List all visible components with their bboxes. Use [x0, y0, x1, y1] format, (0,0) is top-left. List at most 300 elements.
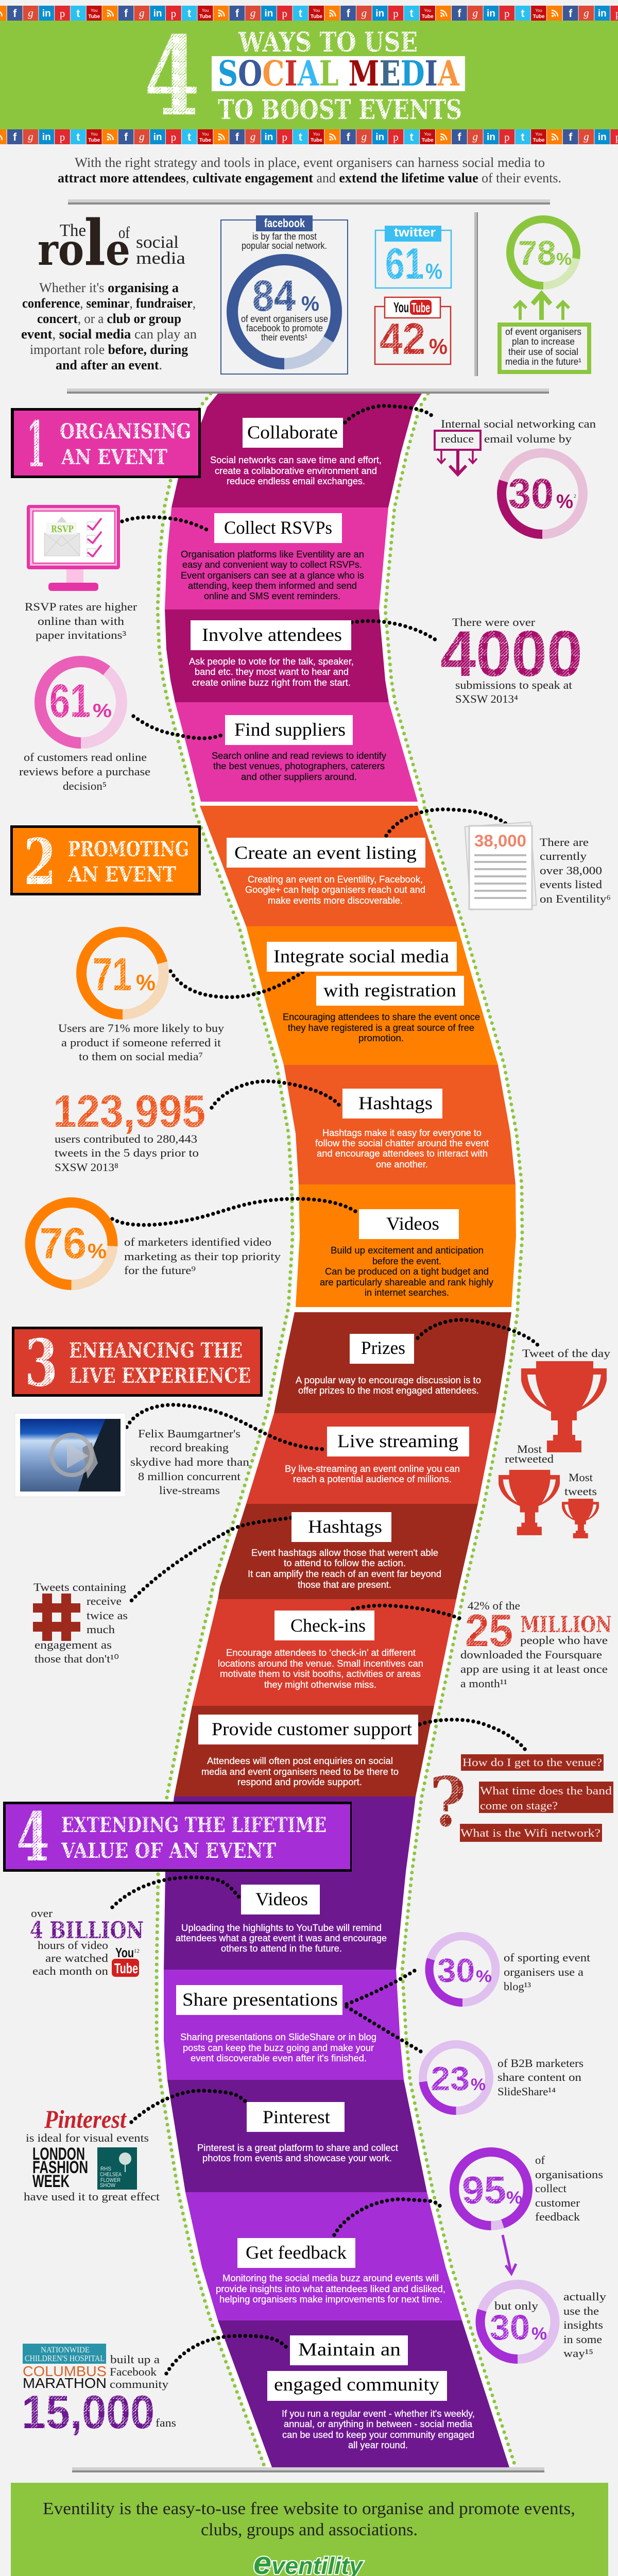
stat: 4 billion hours [30, 1907, 144, 1977]
step: videos (promoting): before the event. [372, 1256, 441, 1266]
logo: rhs chelsea flower show: CHELSEA [100, 2172, 122, 2178]
icon and stat: 38,000 events listed: over 38,000 [540, 864, 602, 877]
stat: internal social networking 30%: Internal social networking can [441, 417, 596, 430]
icon and stat: 38,000 events listed: on Eventility⁶ [540, 892, 611, 905]
logo: london fashion week [32, 2144, 88, 2191]
logo: london fashion week: FASHION [32, 2158, 88, 2177]
stat: only 30% use insights: 30 [490, 2308, 530, 2347]
stat: 71% referrals: Users are 71% more likely to buy [58, 1022, 224, 1035]
paragraph: role of social media: concert, or a club or group [37, 311, 181, 326]
panel: facebook: facebook to promote [246, 323, 323, 333]
stat: only 30% use insights: use the [563, 2304, 599, 2317]
stat: tweets containing hashtags: those that don't¹⁰ [35, 1652, 119, 1665]
stat: 61% reviews: decision⁵ [63, 779, 107, 792]
panel: facebook: popular social network. [242, 241, 327, 251]
panel: future use 78%: plan to increase [512, 336, 575, 347]
stat text: rsvp rates [25, 600, 138, 641]
stat: only 30% use insights: but only [494, 2299, 538, 2312]
step: check-ins [218, 1611, 423, 1690]
heading: the role of social media: social [136, 233, 179, 252]
section header 3: enhancing the live experience: LIVE EXPERIENCE [70, 1364, 251, 1388]
step: prizes [296, 1334, 481, 1396]
step: pinterest: Pinterest is a great platform to share and collect [197, 2143, 398, 2153]
step: provide customer support: media and event organisers need to be there to [201, 1767, 399, 1777]
stat: 95% collect feedback: 95 [462, 2168, 506, 2212]
stat: 76% video marketing: 76 [40, 1219, 87, 1267]
title box: social media: SOCIAL MEDIA [218, 53, 460, 94]
step: videos (promoting): Videos [386, 1213, 439, 1234]
step: maintain an engaged community: Maintain an [298, 2339, 401, 2360]
step: create an event listing: make events more discoverable. [268, 895, 403, 906]
stat: 76% video marketing: % [88, 1239, 107, 1263]
stat: 76% video marketing: marketing as their top priority [124, 1250, 281, 1263]
stat: 123,995 users: users contributed to 280,443 [55, 1132, 197, 1145]
section header 1: organising an event: 1 [27, 407, 45, 481]
stat: pinterest visual events: have used it to great effect [24, 2190, 160, 2203]
paragraph: role of social media: and after an event. [56, 358, 162, 372]
stat: 123,995 users: 123,995 [53, 1086, 205, 1137]
stat: 4000 submissions: submissions to speak at [455, 679, 572, 691]
step: find suppliers: Search online and read reviews to identify [212, 751, 386, 761]
icon and stat: 38,000 events listed [465, 822, 611, 910]
step: check-ins: Encourage attendees to ‘check-in’ at different [226, 1648, 416, 1658]
panel: facebook: of event organisers use [241, 314, 328, 324]
stat: 71% referrals: % [136, 970, 156, 995]
stat: 30% blog: % [476, 1967, 492, 1986]
step: get feedback: helping organisers make improvements for next time. [219, 2294, 442, 2304]
step: involve attendees: Involve attendees [202, 624, 342, 645]
step: find suppliers [212, 715, 386, 782]
donut: 78%: 78 [518, 234, 556, 273]
step: hashtags (promoting) [315, 1089, 489, 1170]
step: hashtags (promoting): Hashtags [358, 1093, 433, 1113]
social icon strip: top [0, 6, 618, 21]
stat: internal social networking 30%: email volume by [484, 432, 572, 445]
step: share presentations: Sharing presentations on SlideShare or in blog [180, 2032, 376, 2042]
section header 2: promoting an event: AN EVENT [67, 862, 176, 887]
stat: 30% blog: 30 [437, 1952, 475, 1989]
stat: 25 million foursquare: app are using it at least once [460, 1663, 608, 1675]
stat: 23% slideshare: % [471, 2075, 486, 2094]
step: videos (lifetime): attendees what a great event it was and encourage [176, 1933, 387, 1943]
stat: 76% video marketing: of marketers identified video [124, 1235, 271, 1248]
stat: 4000 submissions: SXSW 2013⁴ [455, 692, 518, 705]
stat: internal social networking 30%: reduce [441, 432, 474, 445]
panel: future use 78%: media in the future¹ [505, 357, 581, 367]
stat text: felix baumgartner: skydive had more than [130, 1455, 249, 1468]
step: share presentations: posts can keep the buzz going and make your [183, 2043, 374, 2053]
stat: 71% referrals [58, 932, 224, 1063]
stat text: rsvp rates: online than with [38, 615, 124, 628]
step: videos (lifetime) [176, 1885, 387, 1954]
panel: twitter: twitter [394, 226, 436, 240]
header banner [0, 6, 618, 144]
step: hashtags (promoting): Hashtags make it easy for everyone to [322, 1128, 482, 1138]
stat: columbus marathon 15,000 fans: community [110, 2378, 168, 2391]
stat: 23% slideshare: of B2B marketers [497, 2057, 583, 2070]
heading: the role of social media: of [118, 223, 130, 242]
footer panel: eventility call to action: clubs, groups and associations. [201, 2520, 418, 2539]
heading: the role of social media: The [60, 221, 86, 240]
icons: trophies with labels: retweeted [505, 1452, 554, 1465]
stat: 61% reviews: % [93, 700, 112, 721]
step: pinterest: Pinterest [263, 2107, 330, 2127]
icon: rsvp monitor [27, 505, 120, 591]
step: prizes: Prizes [361, 1337, 405, 1358]
title line: ways to use: WAYS TO USE [238, 27, 418, 58]
heading: the role of social media [38, 206, 185, 280]
logo: london fashion week: WEEK [32, 2172, 70, 2191]
stat: 123,995 users [53, 1086, 205, 1174]
step: live streaming: By live-streaming an event online you can [285, 1464, 460, 1474]
stat: 23% slideshare: 23 [431, 2060, 470, 2097]
question boxes: What is the Wifi network? [460, 1826, 600, 1839]
stat: 30% blog: blog¹³ [504, 1980, 531, 1993]
stat: tweets containing hashtags: twice as [87, 1609, 128, 1622]
stat: 4 billion hours: over [31, 1907, 53, 1920]
title numeral 4: 4 [144, 12, 200, 140]
stat: 25 million foursquare: a month¹¹ [460, 1677, 507, 1690]
icons: trophies with labels: tweets [564, 1485, 597, 1498]
donut: 84% [232, 260, 336, 364]
stat: only 30% use insights [480, 2284, 606, 2360]
section header 1: organising an event [11, 407, 201, 481]
step: pinterest [197, 2102, 398, 2163]
step: integrate social media with registration: promotion. [358, 1033, 404, 1043]
step: collect rsvps: Organisation platforms like Eventility are an [181, 549, 364, 560]
step: prizes: offer prizes to the most engaged attendees. [298, 1385, 479, 1396]
step: collaborate: create a collaborative environment and [215, 466, 377, 476]
icon and stat: 38,000 events listed: There are [540, 836, 589, 849]
logo: nationwide children's hospital: CHILDREN'S HOSPITAL [25, 2353, 105, 2363]
paragraph: role of social media: conference, seminar, fundraiser, [22, 296, 196, 311]
icons: trophies with labels: Most [517, 1443, 542, 1455]
footer panel: eventility call to action [11, 2483, 608, 2576]
step: collect rsvps: online and SMS event reminders. [204, 591, 340, 601]
stat text: rsvp rates: RSVP rates are higher [25, 600, 138, 613]
step: videos (lifetime): Uploading the highlights to YouTube will remind [181, 1923, 382, 1933]
step: maintain an engaged community: all year round. [348, 2440, 408, 2450]
step: get feedback [216, 2238, 445, 2304]
step: collect rsvps: easy and convenient way to collect RSVPs. [182, 560, 362, 570]
stat: 61% reviews: of customers read online [24, 751, 147, 764]
step: collaborate: Collaborate [247, 422, 338, 443]
stat: 30% blog: organisers use a [504, 1965, 583, 1978]
step: create an event listing: Create an event listing [234, 842, 417, 863]
step: involve attendees: Ask people to vote for the talk, speaker, [189, 656, 354, 667]
icon: hash symbol [33, 1594, 80, 1641]
stat: tweets containing hashtags [33, 1581, 128, 1665]
icons: trophies with labels: Most [569, 1471, 593, 1484]
section header 4: extending the lifetime value: EXTENDING THE LIFETIME [61, 1813, 327, 1837]
stat: 123,995 users: SXSW 2013⁸ [55, 1161, 118, 1174]
icon and stat: 38,000 events listed: events listed [540, 878, 602, 891]
intro text: With the right strategy and tools in place, event organisers can harness social media to [75, 155, 545, 170]
stat: columbus marathon 15,000 fans [22, 2344, 176, 2438]
stat text: felix baumgartner: 8 million concurrent [138, 1470, 241, 1483]
social icon strip: bottom [0, 129, 618, 144]
section header 1: organising an event: AN EVENT [61, 445, 167, 469]
panel: youtube [375, 297, 451, 364]
section header 4: extending the lifetime value: VALUE OF AN EVENT [61, 1839, 276, 1863]
step: collect rsvps [181, 513, 364, 601]
step: hashtags (live): Event hashtags allow those that weren't able [251, 1548, 438, 1558]
stat text: felix baumgartner: live-streams [159, 1484, 220, 1497]
stat: 76% video marketing: for the future⁹ [124, 1264, 196, 1277]
logo: rhs chelsea flower show: SHOW [100, 2182, 116, 2189]
step: integrate social media with registration: Encouraging attendees to share the event once [283, 1012, 480, 1022]
stat: 95% collect feedback: % [506, 2188, 522, 2208]
step: videos (promoting): are particularly shareable and rank highly [320, 1277, 493, 1287]
step: hashtags (promoting): follow the social chatter around the event [315, 1138, 489, 1148]
logo: london fashion week: LONDON [32, 2144, 85, 2164]
step: share presentations [176, 1985, 376, 2063]
step: maintain an engaged community [267, 2335, 475, 2450]
stat: 61% reviews [19, 662, 150, 792]
stat: 61% reviews: reviews before a purchase [19, 765, 150, 778]
logo: nationwide children's hospital [23, 2344, 106, 2364]
panel: youtube: % [429, 334, 448, 359]
step: get feedback: Monitoring the social media buzz around events will [222, 2273, 439, 2283]
panel: facebook [221, 215, 348, 374]
logo: nationwide children's hospital: NATIONWIDE [41, 2346, 90, 2354]
step: find suppliers: the best venues, photographers, caterers [213, 761, 385, 771]
section header 3: enhancing the live experience: 3 [25, 1326, 58, 1401]
stat: 95% collect feedback: organisations [535, 2168, 603, 2181]
stat: 30% blog [430, 1936, 590, 2003]
step: hashtags (live): Hashtags [308, 1516, 382, 1537]
step: share presentations: event discoverable even after it's finished. [191, 2053, 367, 2063]
stat: only 30% use insights: way¹⁵ [563, 2347, 593, 2360]
panel: twitter [375, 226, 451, 289]
stat: 95% collect feedback [454, 2152, 603, 2226]
footer panel: eventility call to action: Eventility is the easy-to-use free website to organise and promote events, [43, 2499, 575, 2518]
step: hashtags (live): It can amplify the reach of an event far beyond [248, 1569, 441, 1579]
question boxes [430, 1754, 613, 1842]
step: involve attendees: create online buzz right from the start. [192, 677, 351, 688]
stat: 71% referrals: a product if someone referred it [61, 1036, 221, 1049]
step: collect rsvps: Event organisers can see at a glance who is [181, 570, 364, 581]
step: prizes: A popular way to encourage discussion is to [296, 1375, 481, 1385]
step: share presentations: Share presentations [182, 1989, 338, 2010]
panel: youtube: Tube [411, 300, 430, 315]
panel: twitter: % [425, 259, 442, 284]
stat: 25 million foursquare: 42% of the [468, 1599, 520, 1612]
connectors: dotted lines linking steps to stats [112, 406, 540, 2374]
title line: to boost events: TO BOOST EVENTS [218, 94, 462, 126]
step: hashtags (live) [248, 1512, 441, 1590]
stat: pinterest visual events: is ideal for visual events [26, 2131, 149, 2144]
step: get feedback: provide insights into what attendees liked and disliked, [216, 2284, 445, 2294]
logo: rhs chelsea flower show [97, 2147, 137, 2190]
step: maintain an engaged community: If you run a regular event - whether it's weekly, [282, 2409, 475, 2419]
stat: 4 billion hours: hours of video [38, 1939, 108, 1952]
stat: columbus marathon 15,000 fans: built up a [110, 2353, 160, 2366]
step: integrate social media with registration: they have registered is a great source of free [288, 1023, 474, 1033]
panel: youtube: You [393, 299, 409, 315]
section header 2: promoting an event [10, 825, 201, 900]
stat: 23% slideshare: SlideShare¹⁴ [497, 2085, 556, 2098]
step: videos (lifetime): Videos [255, 1889, 308, 1909]
step: hashtags (live): to attend to follow the action. [284, 1558, 406, 1568]
step: live streaming: Live streaming [337, 1431, 458, 1451]
stat: tweets containing hashtags: much [87, 1623, 115, 1636]
stat: 4000 submissions: 4000 [440, 618, 582, 690]
logo: columbus marathon: COLUMBUS [23, 2363, 107, 2379]
logo: youtube: 12 [134, 1948, 140, 1954]
stat: tweets containing hashtags: engagement as [35, 1638, 112, 1651]
step: check-ins: Check-ins [290, 1615, 366, 1636]
stat: 71% referrals: 71 [93, 949, 132, 1001]
step: maintain an engaged community: can be used to keep your community engaged [282, 2430, 474, 2440]
step: check-ins: motivate them to visit booths, activities or areas [220, 1669, 421, 1679]
arrows up [514, 294, 569, 320]
stat: only 30% use insights: in some [563, 2333, 602, 2346]
stat: 95% collect feedback: customer [535, 2196, 580, 2209]
stat: pinterest visual events: Pinterest [44, 2105, 127, 2133]
heading: the role of social media: media [136, 249, 185, 268]
step: create an event listing: Creating an event on Eventility, Facebook, [248, 874, 423, 885]
step: find suppliers: and other suppliers around. [241, 772, 357, 782]
step: provide customer support: Attendees will often post enquiries on social [207, 1756, 393, 1766]
section header 4: extending the lifetime value: 4 [16, 1798, 49, 1876]
icons: trophies with labels [499, 1347, 610, 1538]
step: pinterest: photos from events and showcase your work. [202, 2153, 392, 2163]
section header 3: enhancing the live experience: ENHANCING THE [69, 1338, 243, 1363]
step: videos (promoting) [320, 1209, 493, 1298]
step: check-ins: locations around the venue. Small incentives can [218, 1658, 423, 1669]
donut: 84%: 84 [252, 272, 296, 320]
step: hashtags (promoting): one another. [376, 1159, 428, 1170]
logo: columbus marathon: MARATHON [23, 2375, 107, 2391]
icon: rsvp monitor: RSVP [51, 524, 74, 535]
arrow: from 95% to 30% [503, 2235, 516, 2274]
step: maintain an engaged community: annual, or anything in between - social media [284, 2419, 473, 2429]
stat: 25 million foursquare: people who have [520, 1634, 608, 1647]
stat: internal social networking 30% [435, 417, 596, 534]
step: collaborate: reduce endless email exchanges. [227, 476, 365, 486]
intro text [58, 155, 561, 185]
section header 2: promoting an event: PROMOTING [68, 837, 189, 861]
step: videos (promoting): Can be produced on a tight budget and [325, 1266, 489, 1277]
step: live streaming: reach a potential audience of millions. [293, 1474, 452, 1484]
stat text: felix baumgartner: record breaking [150, 1441, 229, 1454]
donut: 30%: 30 [508, 470, 554, 517]
stat: pinterest visual events [24, 2105, 160, 2203]
panel: future use 78% [500, 219, 589, 372]
panel: future use 78%: their use of social [508, 347, 578, 357]
logo: rhs chelsea flower show: FLOWER [100, 2177, 121, 2183]
question boxes: come on stage? [480, 1799, 558, 1812]
stat: 95% collect feedback: collect [535, 2182, 566, 2195]
panel: youtube: 42 [380, 315, 425, 364]
heading: the role of social media: role [38, 206, 130, 280]
step: create an event listing: Google+ can help organisers reach out and [245, 885, 425, 895]
stat: 61% reviews: 61 [49, 675, 91, 727]
stat: 76% video marketing [30, 1202, 281, 1285]
question boxes: What time does the band [480, 1784, 612, 1797]
step: involve attendees: band etc. they most want to hear and [195, 667, 349, 677]
icons: trophies with labels: Tweet of the day [522, 1347, 610, 1360]
step: videos (promoting): in internet searches. [365, 1287, 449, 1298]
stat: columbus marathon 15,000 fans: fans [156, 2416, 176, 2429]
donut: 30%: % [556, 491, 573, 513]
panel: facebook: their events¹ [261, 332, 307, 343]
step: provide customer support: respond and provide support. [237, 1777, 362, 1787]
step: provide customer support [198, 1715, 418, 1787]
donut: 30% [502, 453, 583, 534]
step: hashtags (live): those that are present. [298, 1580, 391, 1590]
section header 3: enhancing the live experience [12, 1326, 263, 1401]
paragraph: role of social media: event, social media can play an [21, 327, 197, 342]
image: felix baumgartner video still [15, 1413, 126, 1497]
section header 4: extending the lifetime value [3, 1798, 352, 1876]
stat: only 30% use insights: % [531, 2324, 547, 2344]
stat: 71% referrals: to them on social media⁷ [79, 1050, 203, 1063]
step: collect rsvps: attending, keep them informed and send [188, 581, 357, 591]
question boxes: How do I get to the venue? [462, 1756, 602, 1769]
donut: 30%: 2 [574, 494, 576, 499]
stat: 23% slideshare [423, 2044, 583, 2111]
paragraph: role of social media [21, 280, 197, 372]
stat: 23% slideshare: share content on [497, 2071, 581, 2083]
step: collect rsvps: Collect RSVPs [224, 517, 332, 538]
step: provide customer support: Provide customer support [212, 1719, 412, 1739]
stat: 4 billion hours: each month on [32, 1964, 108, 1977]
panel: facebook: is by far the most [252, 231, 317, 242]
arrows down [437, 451, 477, 474]
stat: tweets containing hashtags: receive [87, 1595, 122, 1607]
icon and stat: 38,000 events listed: 38,000 [474, 832, 526, 850]
icon: question mark: ? [430, 1762, 466, 1842]
step: create an event listing [227, 838, 425, 906]
stat: columbus marathon 15,000 fans: Facebook [110, 2365, 157, 2378]
logo: rhs chelsea flower show: RHS [100, 2166, 111, 2172]
step: find suppliers: Find suppliers [234, 719, 346, 740]
stat: only 30% use insights: insights [563, 2318, 603, 2331]
step: integrate social media with registration: with registration [323, 980, 456, 1001]
panel: future use 78%: of event organisers [505, 327, 581, 337]
ribbon: winding central band [154, 394, 525, 2467]
step: hashtags (promoting): and encourage attendees to interact with [317, 1148, 488, 1159]
donut: 84%: % [301, 292, 319, 315]
stat: tweets containing hashtags: Tweets containing [33, 1581, 126, 1594]
step: collaborate [210, 418, 382, 486]
stat text: rsvp rates: paper invitations³ [36, 629, 126, 641]
stat text: felix baumgartner: Felix Baumgartner's [138, 1427, 241, 1440]
step: collaborate: Social networks can save time and effort, [210, 455, 382, 465]
panel: facebook: facebook [264, 216, 305, 230]
step: maintain an engaged community: engaged community [274, 2374, 439, 2395]
stat: 4 billion hours: 4 BILLION [30, 1917, 144, 1944]
step: videos (lifetime): others to attend in the future. [221, 1943, 342, 1954]
step: involve attendees [189, 620, 354, 688]
stat: 4 billion hours: are watched [45, 1952, 108, 1964]
logo: youtube: You [115, 1945, 134, 1960]
paragraph: role of social media: Whether it's organising a [39, 280, 179, 295]
step: get feedback: Get feedback [246, 2242, 347, 2263]
section header 2: promoting an event: 2 [24, 825, 56, 900]
logo: youtube: Tube [114, 1960, 138, 1976]
stat: 25 million foursquare: downloaded the Foursquare [460, 1648, 602, 1661]
step: integrate social media with registration [267, 942, 480, 1043]
stat: only 30% use insights: actually [563, 2290, 606, 2303]
logo: youtube [112, 1945, 140, 1977]
section header 1: organising an event: ORGANISING [60, 419, 191, 444]
stat: 25 million foursquare [460, 1599, 612, 1690]
stat: 25 million foursquare: 25 [465, 1605, 513, 1656]
donut: 78% [510, 219, 577, 285]
